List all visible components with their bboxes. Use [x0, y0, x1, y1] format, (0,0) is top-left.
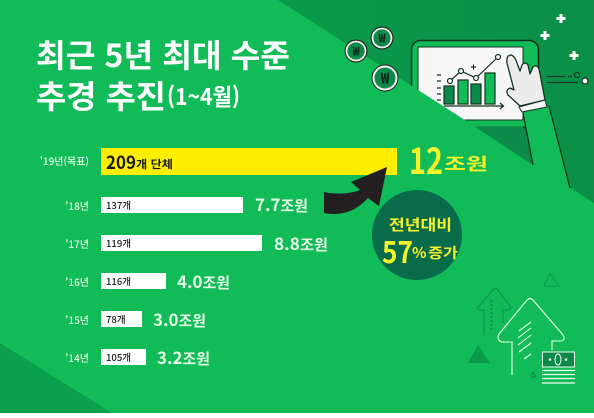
- row: 2018: '18년: [65, 198, 89, 213]
- title: 최근 5년 최대 수준: [36, 31, 290, 77]
- callout: 57% increase: 57: [382, 228, 413, 272]
- row: 2014: '14년: [65, 350, 89, 365]
- sparkles: [540, 14, 578, 60]
- row: 2019 target: 209: [106, 149, 136, 175]
- row: 2016: '16년: [65, 274, 89, 289]
- decorative triangles: [468, 274, 559, 377]
- callout: 57% increase: 증가: [428, 243, 458, 263]
- row: 2014: 3.2조원: [157, 344, 210, 369]
- decorative speed lines: [547, 72, 588, 84]
- row: 2016: 4.0조원: [177, 268, 230, 293]
- icon: won coins: ₩: [351, 42, 360, 60]
- row: 2015: [65, 306, 206, 331]
- row: 2017: 119개: [106, 236, 131, 250]
- row: 2016: [65, 268, 230, 293]
- row: 2019 target: 12: [409, 133, 443, 185]
- callout: 57% increase: [372, 190, 462, 280]
- row: 2019 target: '19년(목표): [40, 153, 89, 168]
- row: 2019 target: 조원: [444, 150, 488, 175]
- icon: large up arrow: [498, 298, 564, 375]
- row: 2014: 105개: [106, 350, 131, 364]
- icon: won coins: [344, 26, 398, 92]
- row: 2015: 3.0조원: [153, 306, 206, 331]
- title: [36, 31, 290, 118]
- row: 2018: 7.7조원: [255, 191, 308, 216]
- row: 2017: '17년: [65, 236, 89, 251]
- icon: banknotes: [542, 352, 575, 383]
- row: 2016: 116개: [106, 274, 131, 288]
- icon: won coins: ₩: [377, 30, 386, 46]
- row: 2015: 78개: [106, 312, 126, 326]
- row: 2017: [65, 230, 328, 255]
- icon: pointing hand and sleeve: [507, 55, 570, 188]
- row: 2018: [65, 191, 308, 216]
- callout: 57% increase: 전년대비: [389, 214, 452, 235]
- row: 2014: [65, 344, 210, 369]
- row: 2017: 8.8조원: [274, 230, 328, 255]
- row: 2018: 137개: [106, 198, 131, 212]
- title: 추경 추진: [36, 72, 166, 118]
- row: 2019 target: [40, 133, 488, 185]
- icon: tablet with chart: [412, 40, 538, 128]
- icon: won coins: ₩: [380, 68, 391, 88]
- bar chart: [437, 54, 504, 109]
- shadow under tablet: [475, 127, 533, 165]
- callout: 57% increase: %: [412, 242, 426, 263]
- arrow: [324, 167, 387, 214]
- icon: small up arrow: [478, 288, 511, 335]
- row: 2015: '15년: [65, 312, 89, 327]
- row: 2019 target: 개 단체: [136, 156, 173, 172]
- title: (1~4월): [167, 78, 240, 112]
